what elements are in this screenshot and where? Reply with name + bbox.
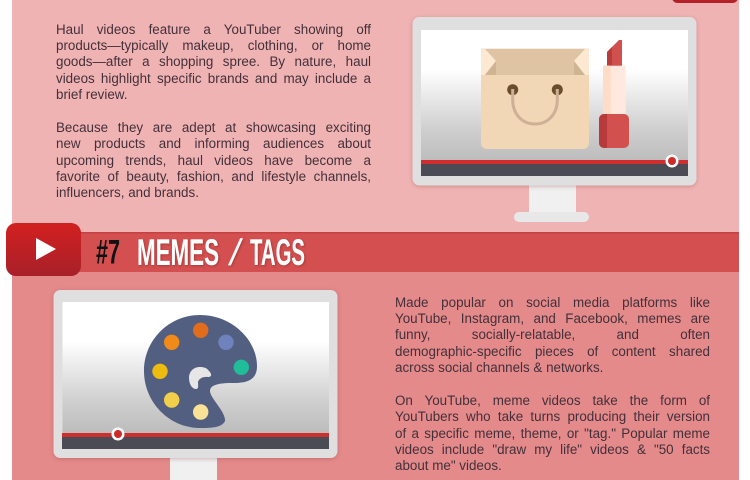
text block: memes description: YouTube, Instagram, and Facebook, memes are bbox=[395, 311, 710, 326]
monitor frame bbox=[54, 290, 338, 458]
text block: memes description: of a specific meme, theme, or "tag." Popular meme bbox=[395, 426, 710, 441]
text block: memes description: YouTubers who take turns producing their version bbox=[395, 409, 710, 424]
panel: upper section background bbox=[12, 0, 739, 232]
heading number: #7 bbox=[96, 234, 120, 272]
heading title: / bbox=[227, 231, 245, 273]
text block: memes description: across social channels & networks. bbox=[395, 360, 603, 375]
banner strip bbox=[12, 232, 739, 272]
monitor stand bbox=[170, 458, 217, 480]
text block: haul videos description: favorite of beauty, fashion, and lifestyle channels, bbox=[56, 169, 371, 184]
video progress bar bbox=[62, 428, 329, 449]
icon: paint palette bbox=[144, 315, 257, 428]
icon: lipstick bbox=[599, 40, 629, 148]
monitor stand bbox=[514, 185, 589, 222]
text block: haul videos description: brief review. bbox=[56, 87, 127, 102]
text block: memes description: funny, socially-relatable, and often bbox=[395, 327, 710, 342]
text block: memes description: Made popular on social media platforms like bbox=[395, 294, 710, 310]
heading title: TAGS bbox=[250, 232, 305, 273]
text block: memes description bbox=[395, 294, 710, 473]
text block: memes description: videos include "draw my life" videos & "50 facts bbox=[395, 442, 710, 457]
icon: shopping bag bbox=[481, 49, 589, 149]
video progress bar bbox=[421, 154, 688, 176]
monitor screen bbox=[421, 30, 688, 161]
panel: lower section background bbox=[12, 272, 739, 480]
monitor screen bbox=[62, 302, 329, 433]
text block: haul videos description: new products and informing audiences about bbox=[56, 136, 371, 151]
previous section play button edge bbox=[672, 0, 738, 3]
monitor frame bbox=[412, 17, 696, 186]
text block: haul videos description bbox=[56, 22, 371, 200]
text block: haul videos description: products—typically makeup, clothing, or home bbox=[56, 38, 371, 53]
text block: haul videos description: influencers, and brands. bbox=[56, 185, 199, 200]
text block: memes description: On YouTube, meme videos take the form of bbox=[395, 393, 710, 408]
text block: memes description: about me" videos. bbox=[395, 458, 502, 473]
text block: haul videos description: upcoming trends, haul videos have become a bbox=[56, 153, 371, 168]
text block: memes description: demographic-specific pieces of content shared bbox=[395, 344, 710, 359]
text block: haul videos description: Haul videos feature a YouTuber showing off bbox=[56, 22, 371, 36]
text block: haul videos description: goods—after a shopping spree. By nature, haul bbox=[56, 54, 371, 69]
heading title: MEMES bbox=[137, 232, 219, 273]
text block: haul videos description: Because they are adept at showcasing exciting bbox=[56, 120, 371, 135]
text block: haul videos description: videos highlight specific brands and may include a bbox=[56, 71, 371, 86]
icon: play button bbox=[6, 223, 81, 276]
